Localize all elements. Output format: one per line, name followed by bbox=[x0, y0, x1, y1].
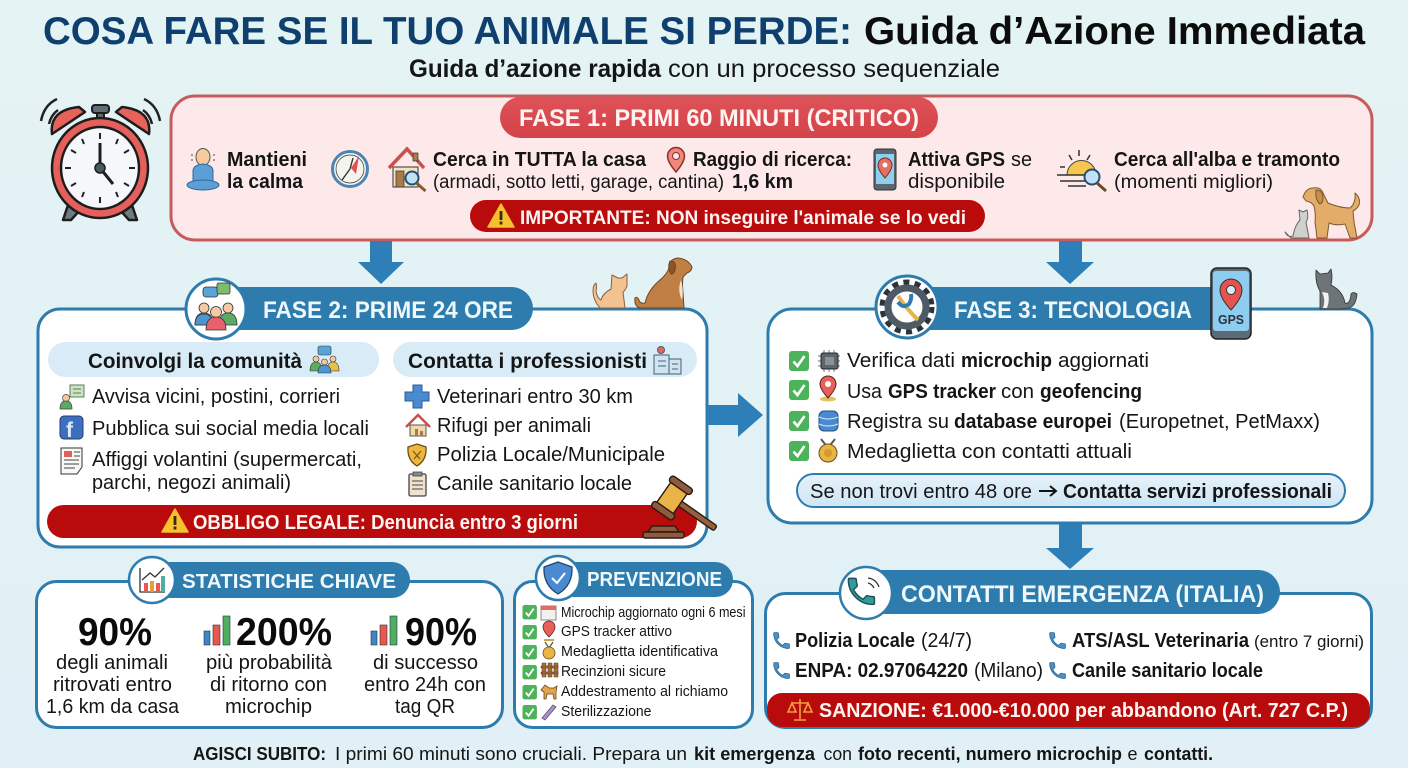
icon: house search bbox=[389, 149, 426, 191]
heading: contatti: CONTATTI EMERGENZA (ITALIA) bbox=[901, 581, 1264, 608]
panel: statistiche chiave bbox=[36, 557, 502, 728]
icon: dog and cat bbox=[1285, 188, 1360, 238]
icon: neighbours bbox=[60, 385, 84, 409]
subtitle: Guida d’azione rapida bbox=[409, 55, 662, 83]
text: database europei bbox=[847, 411, 1320, 433]
heading: statistiche: STATISTICHE CHIAVE bbox=[182, 571, 396, 593]
stat: 90% qr: tag QR bbox=[395, 696, 455, 718]
heading: fase 3: FASE 3: TECNOLOGIA bbox=[954, 297, 1192, 324]
text: verifica microchip: aggiornati bbox=[1058, 350, 1149, 372]
text: database europei: (Europetnet, PetMaxx) bbox=[1119, 411, 1320, 433]
footer note: I primi 60 minuti sono cruciali. Prepara un bbox=[335, 744, 687, 764]
text: medaglietta: Medaglietta con contatti attuali bbox=[847, 441, 1132, 463]
heading: contatti bbox=[840, 567, 1280, 619]
text: gps tracker attivo: GPS tracker attivo bbox=[561, 623, 672, 640]
stat: 90% qr bbox=[364, 611, 486, 718]
stat: 90%: ritrovati entro bbox=[53, 674, 172, 696]
text: affiggi volantini: Affiggi volantini (supermercati, bbox=[92, 449, 362, 471]
text: attiva gps: se bbox=[1011, 149, 1032, 171]
contact: ats asl bbox=[1050, 630, 1364, 652]
icon: hospital bbox=[654, 346, 681, 374]
stat: 200%: 200% bbox=[236, 611, 332, 654]
text: attiva gps: Attiva GPS bbox=[908, 149, 1005, 171]
text: veterinari: Veterinari entro 30 km bbox=[437, 386, 633, 408]
footer note: con bbox=[824, 744, 852, 764]
text: attiva gps bbox=[908, 149, 1032, 193]
text: mantieni la calma bbox=[227, 149, 307, 193]
text: database europei: database europei bbox=[954, 411, 1112, 433]
stat: 200%: di ritorno con bbox=[210, 674, 327, 696]
icon: grey cat bbox=[1316, 269, 1357, 309]
text: mantieni la calma: Mantieni bbox=[227, 149, 307, 171]
heading: fase 2 bbox=[186, 279, 533, 339]
stat: 90% qr: di successo bbox=[373, 652, 478, 674]
stat: 200%: più probabilità bbox=[206, 652, 333, 674]
footer note: kit emergenza bbox=[694, 744, 816, 764]
arrow: fase 3 to contatti bbox=[1046, 524, 1094, 569]
icon: growth chart bbox=[140, 568, 165, 592]
callout: importante: IMPORTANTE: NON inseguire l'animale se lo vedi bbox=[520, 207, 966, 229]
stat: 90% bbox=[46, 611, 180, 718]
text: sterilizzazione: Sterilizzazione bbox=[561, 703, 652, 720]
text: microchip aggiornato: Microchip aggiornato ogni 6 mesi bbox=[561, 604, 746, 621]
contact: enpa: ENPA: 02.97064220 bbox=[795, 660, 968, 682]
icon: sunrise search bbox=[1057, 150, 1106, 191]
text: database europei: Registra su bbox=[847, 411, 949, 433]
text: raggio di ricerca: 1,6 km bbox=[732, 171, 793, 193]
callout: se non trovi: Se non trovi entro 48 ore bbox=[810, 481, 1032, 503]
contact: polizia locale: (24/7) bbox=[921, 630, 972, 652]
icon: phone gps bbox=[874, 149, 896, 190]
icon: clipboard bbox=[409, 472, 426, 496]
heading: prevenzione: PREVENZIONE bbox=[587, 569, 722, 591]
stat: 90%: 1,6 km da casa bbox=[46, 696, 180, 718]
stat: 90% qr: entro 24h con bbox=[364, 674, 486, 696]
contact: polizia locale bbox=[774, 630, 972, 652]
heading: fase 3 bbox=[876, 268, 1251, 339]
text: cerca alba tramonto: Cerca all'alba e tramonto bbox=[1114, 149, 1340, 171]
contact: canile: Canile sanitario locale bbox=[1072, 660, 1263, 682]
stat: 200% bbox=[204, 611, 333, 718]
list: checks bbox=[789, 351, 809, 461]
icon: dog bbox=[635, 258, 692, 308]
text: cerca alba tramonto: (momenti migliori) bbox=[1114, 172, 1273, 193]
contact: enpa: (Milano) bbox=[974, 660, 1043, 682]
callout: sanzione bbox=[767, 693, 1370, 727]
sub-panel: contatta i professionisti bbox=[393, 342, 697, 377]
icon: medical bbox=[542, 705, 556, 720]
icon: shelter bbox=[406, 415, 430, 436]
footer note: contatti. bbox=[1144, 744, 1213, 764]
icon: facebook: f bbox=[66, 419, 74, 442]
text: cerca alba tramonto bbox=[1114, 149, 1340, 193]
list: prevention checks bbox=[522, 605, 537, 719]
text: gps tracker: Usa bbox=[847, 381, 883, 403]
icon: meditation bbox=[187, 148, 219, 190]
stat: 90%: degli animali bbox=[56, 652, 168, 674]
callout: se non trovi: Contatta servizi professionali bbox=[1063, 481, 1332, 503]
icon: compass bbox=[332, 152, 368, 186]
icon: gps pin bbox=[820, 376, 836, 402]
panel: fase 2 bbox=[38, 258, 726, 547]
icon: gavel bbox=[643, 475, 726, 544]
icon: alarm clock bbox=[41, 99, 160, 220]
icon: gps phone bbox=[1211, 268, 1251, 339]
text: mantieni la calma: la calma bbox=[227, 171, 304, 193]
text: pubblica social: Pubblica sui social media locali bbox=[92, 418, 369, 440]
text: gps tracker bbox=[847, 381, 1142, 403]
arrow: fase 2 to fase 3 bbox=[707, 393, 763, 437]
text: gps tracker: GPS tracker bbox=[888, 381, 996, 403]
contact: ats asl: (entro 7 giorni) bbox=[1254, 632, 1364, 651]
icon: scales bbox=[788, 699, 812, 720]
text: avvisa vicini: Avvisa vicini, postini, corrieri bbox=[92, 386, 340, 408]
icon: medal small bbox=[543, 642, 555, 659]
panel: contatti emergenza bbox=[766, 567, 1372, 728]
footer note bbox=[193, 744, 1213, 764]
text: affiggi volantini bbox=[92, 449, 362, 494]
icon: calendar bbox=[541, 606, 556, 620]
stat: 90% qr: 90% bbox=[405, 611, 477, 654]
title: COSA FARE SE IL TUO ANIMALE SI PERDE: bbox=[43, 10, 852, 53]
text: canile: Canile sanitario locale bbox=[437, 473, 632, 495]
text: gps tracker: con bbox=[1001, 381, 1034, 403]
text: polizia: Polizia Locale/Municipale bbox=[437, 444, 665, 466]
icon: facebook bbox=[60, 416, 83, 442]
icon: medal bbox=[819, 439, 837, 462]
stat: 200%: microchip bbox=[225, 696, 312, 718]
heading: statistiche bbox=[129, 557, 410, 603]
icon: fence bbox=[541, 663, 558, 677]
icon: gps phone: GPS bbox=[1218, 312, 1244, 327]
callout: sanzione: SANZIONE: €1.000-€10.000 per abbandono (Art. 727 C.P.) bbox=[819, 699, 1348, 722]
callout: obbligo legale: OBBLIGO LEGALE: Denuncia entro 3 giorni bbox=[193, 512, 578, 534]
icon: community bbox=[310, 346, 339, 373]
heading: fase 1: FASE 1: PRIMI 60 MINUTI (CRITICO) bbox=[519, 105, 919, 132]
text: attiva gps: disponibile bbox=[908, 171, 1005, 193]
heading: prevenzione bbox=[536, 556, 733, 600]
panel: fase 1 bbox=[171, 96, 1372, 240]
text: cerca in tutta la casa: (armadi, sotto letti, garage, cantina) bbox=[433, 172, 724, 193]
icon: ringing phone bbox=[848, 578, 879, 604]
text: raggio di ricerca: Raggio di ricerca: bbox=[693, 149, 852, 171]
icon: cat bbox=[593, 274, 627, 308]
text: cerca in tutta la casa: Cerca in TUTTA la casa bbox=[433, 149, 647, 171]
icon: location pin bbox=[668, 148, 684, 172]
footer note: foto recenti, numero microchip bbox=[858, 744, 1122, 764]
icon: pin bbox=[543, 621, 555, 640]
subtitle bbox=[409, 55, 1000, 83]
icon: flyer bbox=[61, 448, 82, 474]
icon: microchip bbox=[818, 350, 841, 372]
icon: database bbox=[819, 411, 838, 431]
text: raggio di ricerca bbox=[693, 149, 852, 193]
callout: importante bbox=[470, 200, 985, 232]
text: recinzioni: Recinzioni sicure bbox=[561, 663, 666, 680]
heading: fase 1 bbox=[500, 97, 938, 138]
contact: enpa bbox=[774, 660, 1043, 682]
contact: ats asl: ATS/ASL Veterinaria bbox=[1072, 630, 1250, 652]
sub-panel: contatta i professionisti: Contatta i professionisti bbox=[408, 350, 647, 373]
stat: 90%: 90% bbox=[78, 611, 152, 654]
footer note: e bbox=[1128, 744, 1138, 764]
text: addestramento: Addestramento al richiamo bbox=[561, 683, 728, 700]
arrow: fase 1 to fase 2 bbox=[358, 241, 404, 284]
text: verifica microchip bbox=[847, 350, 1149, 372]
text: affiggi volantini: parchi, negozi animali) bbox=[92, 472, 291, 494]
text: verifica microchip: Verifica dati bbox=[847, 350, 955, 372]
callout: obbligo legale bbox=[47, 505, 697, 538]
icon: gear and wrench bbox=[882, 282, 932, 332]
text: rifugi: Rifugi per animali bbox=[437, 415, 591, 437]
panel: prevenzione bbox=[514, 556, 752, 728]
subtitle: con un processo sequenziale bbox=[668, 55, 1000, 83]
sub-panel: coinvolgi la comunita bbox=[48, 342, 379, 377]
arrow: fase 1 to fase 3 bbox=[1046, 241, 1094, 284]
title bbox=[43, 10, 1365, 53]
callout: se non trovi bbox=[797, 474, 1345, 507]
icon: shield bbox=[544, 562, 572, 594]
footer note: AGISCI SUBITO: bbox=[193, 744, 326, 764]
text: cerca in tutta la casa bbox=[433, 149, 724, 193]
icon: group chat bbox=[195, 283, 237, 330]
icon: small dog bbox=[541, 685, 557, 699]
panel: fase 3 bbox=[768, 268, 1372, 523]
heading: fase 2: FASE 2: PRIME 24 ORE bbox=[263, 297, 513, 324]
sub-panel: coinvolgi la comunita: Coinvolgi la comunità bbox=[88, 350, 302, 373]
text: gps tracker: geofencing bbox=[1040, 381, 1142, 403]
contact: polizia locale: Polizia Locale bbox=[795, 630, 915, 652]
icon: police badge bbox=[408, 444, 426, 466]
title: Guida d’Azione Immediata bbox=[864, 10, 1365, 53]
icon: vet cross bbox=[405, 385, 429, 408]
text: verifica microchip: microchip bbox=[961, 350, 1052, 372]
text: medaglietta identificativa: Medaglietta identificativa bbox=[561, 643, 719, 660]
